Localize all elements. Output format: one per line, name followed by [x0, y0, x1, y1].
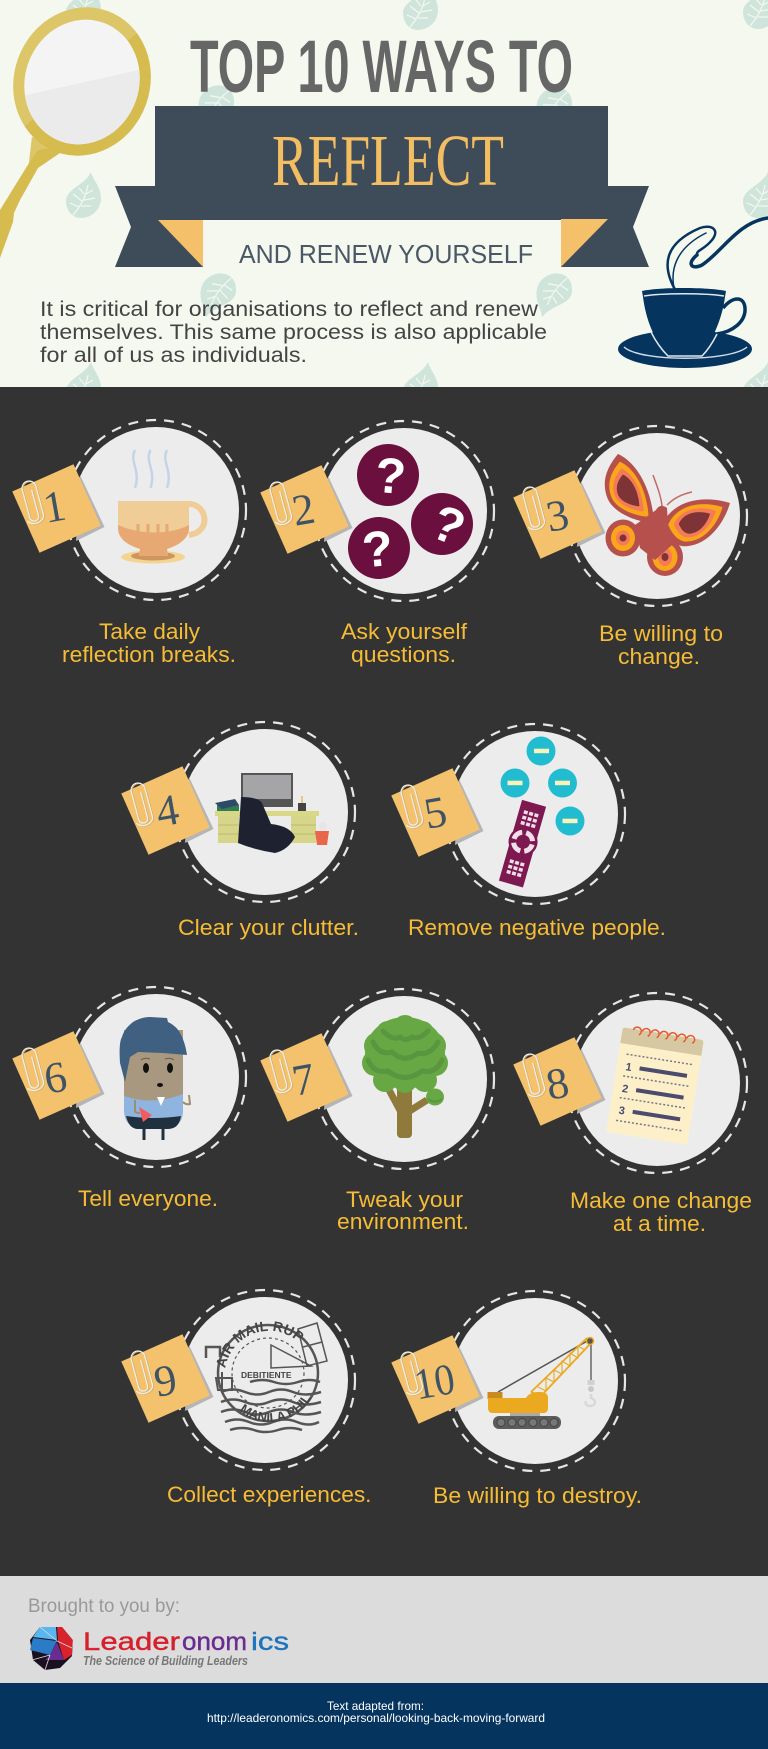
sponsor band — [0, 1576, 768, 1683]
ring and disc — [314, 421, 494, 601]
caption — [62, 619, 236, 667]
caption — [341, 619, 468, 667]
number 5: 5 — [420, 787, 451, 839]
number 2: 2 — [288, 484, 319, 536]
icon: hand mirror — [0, 7, 151, 258]
leaf pattern — [66, 0, 768, 408]
icon: navy tea cup — [618, 218, 768, 368]
icon: minus buttons — [500, 736, 584, 836]
icon: remote control — [497, 799, 548, 888]
caption: Make one change — [570, 1188, 752, 1213]
caption: change. — [618, 644, 700, 669]
icon: air mail stamp: AIR MAIL RUP — [216, 1321, 304, 1368]
item 5: remove negative people — [391, 724, 666, 940]
icon: question marks: ? — [424, 494, 473, 557]
subheading: and renew yourself: AND RENEW YOURSELF — [239, 239, 533, 269]
note with paperclip — [513, 470, 606, 559]
note with paperclip — [260, 465, 352, 554]
logo wordmark: Leader — [83, 1628, 180, 1656]
ring and disc — [66, 420, 246, 600]
caption — [570, 1188, 752, 1236]
item 1: daily reflection breaks — [12, 420, 246, 667]
item 2: ask yourself questions — [260, 421, 494, 667]
caption: Be willing to — [599, 621, 723, 646]
ring and disc — [175, 722, 355, 902]
item 4: clear your clutter — [121, 722, 359, 940]
caption: Tweak your — [346, 1187, 464, 1212]
note with paperclip — [121, 1334, 214, 1423]
caption: Collect experiences. — [167, 1482, 372, 1507]
caption: at a time. — [613, 1211, 706, 1236]
icon: crane — [488, 1338, 595, 1429]
main dark panel — [0, 387, 768, 1576]
icon: air mail stamp: DEBITIENTE — [241, 1370, 292, 1380]
caption: Ask yourself — [341, 619, 468, 644]
note with paperclip — [391, 1335, 484, 1424]
icon: question marks: ? — [373, 447, 408, 505]
source credit: http://leaderonomics.com/personal/looking-back-moving-forward — [207, 1711, 545, 1725]
icon: numbered notepad — [606, 1025, 704, 1145]
item 9: collect experiences — [121, 1288, 372, 1507]
caption — [337, 1187, 469, 1234]
number 9: 9 — [150, 1355, 181, 1407]
icon: numbered notepad: 2 — [621, 1083, 629, 1096]
header background — [0, 0, 768, 387]
item 6: tell everyone — [12, 987, 246, 1211]
intro text: for all of us as individuals. — [40, 343, 307, 367]
icon: numbered notepad: 3 — [618, 1105, 626, 1118]
ring and disc — [175, 1290, 355, 1470]
item 3: be willing to change — [513, 426, 747, 669]
brought to you by: Brought to you by: — [28, 1596, 180, 1617]
intro text: It is critical for organisations to reflect and renew — [40, 297, 538, 321]
icon: tree — [362, 1015, 448, 1138]
caption: reflection breaks. — [62, 642, 236, 667]
ring and disc — [567, 426, 747, 606]
icon: numbered notepad: 1 — [625, 1061, 633, 1074]
logo wordmark: ics — [251, 1628, 289, 1656]
number 4: 4 — [152, 785, 183, 837]
ring and disc — [567, 993, 747, 1173]
ring and disc — [445, 724, 625, 904]
icon: question marks: ? — [360, 520, 395, 578]
caption: Take daily — [99, 619, 201, 644]
ribbon banner — [115, 106, 649, 267]
note with paperclip — [121, 766, 214, 855]
ring and disc — [445, 1291, 625, 1471]
logo tagline: The Science of Building Leaders — [83, 1654, 248, 1668]
icon: butterfly — [605, 454, 730, 576]
icon: question marks — [348, 444, 473, 579]
caption: Remove negative people. — [408, 915, 666, 940]
logo wordmark: onom — [182, 1628, 247, 1656]
number 6: 6 — [40, 1052, 71, 1104]
heading: reflect: REFLECT — [272, 120, 504, 201]
item 8: make one change at a time — [513, 993, 752, 1236]
caption: environment. — [337, 1209, 469, 1234]
note with paperclip — [391, 768, 484, 857]
number 8: 8 — [542, 1058, 573, 1110]
icon: cluttered desk — [215, 773, 329, 853]
icon: air mail stamp — [204, 1321, 328, 1434]
source credit — [207, 1699, 545, 1725]
ring and disc — [314, 989, 494, 1169]
item 10: be willing to destroy — [391, 1291, 642, 1508]
caption: Clear your clutter. — [178, 915, 359, 940]
number 3: 3 — [542, 490, 573, 542]
logo wordmark — [83, 1628, 289, 1656]
note with paperclip — [12, 1031, 104, 1120]
caption: questions. — [351, 642, 456, 667]
note with paperclip — [260, 1033, 352, 1122]
credits band — [0, 1683, 768, 1749]
intro text — [40, 297, 547, 367]
number 1: 1 — [39, 481, 70, 533]
intro text: themselves. This same process is also applicable — [40, 320, 547, 344]
caption — [599, 621, 723, 669]
caption: Be willing to destroy. — [433, 1483, 642, 1508]
number 7: 7 — [288, 1054, 319, 1106]
number 10: 10 — [411, 1354, 458, 1409]
source credit: Text adapted from: — [327, 1699, 424, 1713]
icon: man talking — [120, 1017, 190, 1140]
icon: cup with steam — [118, 450, 204, 564]
item 7: tweak your environment — [260, 989, 494, 1234]
note with paperclip — [12, 464, 104, 553]
note with paperclip — [513, 1037, 606, 1126]
icon: air mail stamp: MANILA PHIL — [240, 1397, 311, 1422]
caption: Tell everyone. — [78, 1186, 218, 1211]
ring and disc — [66, 987, 246, 1167]
logo: leaderonomics gem — [30, 1627, 73, 1670]
